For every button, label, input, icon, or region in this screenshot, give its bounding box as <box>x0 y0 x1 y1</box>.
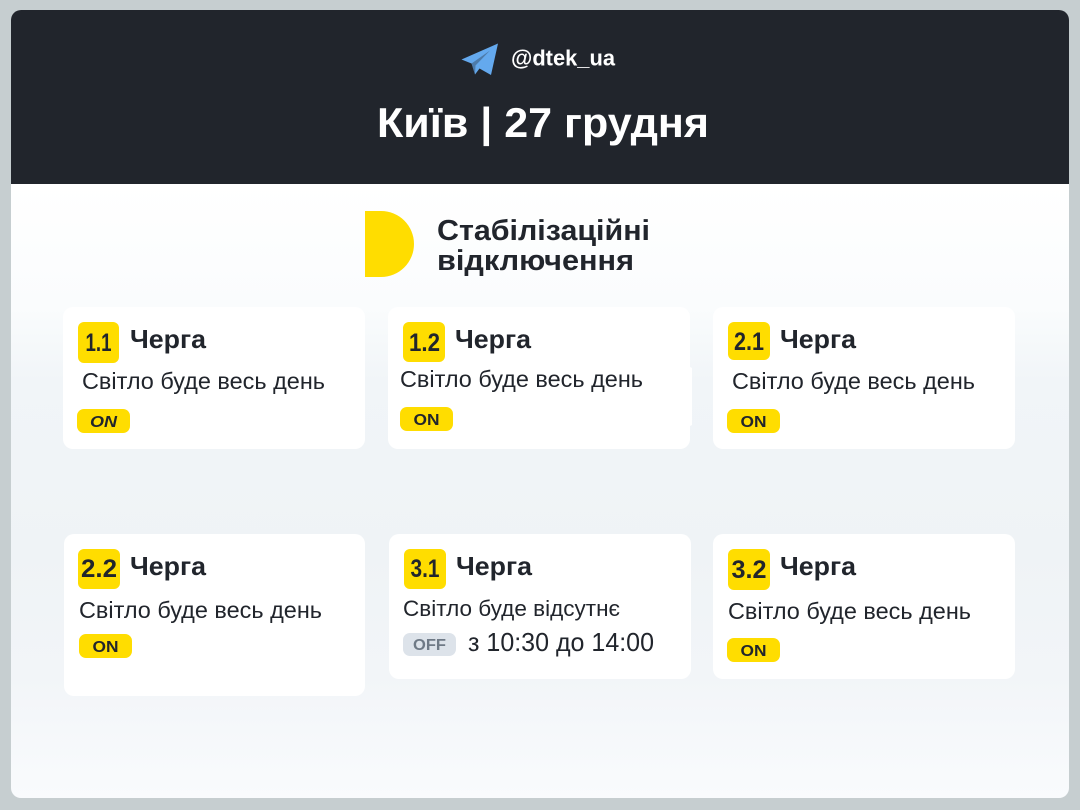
panel: queue 3.1 <box>389 534 691 679</box>
panel: queue 2.2 <box>64 534 365 696</box>
heading: queue: Черга <box>130 324 207 354</box>
status text: Світло буде весь день <box>79 597 322 623</box>
logo: yellow half circle <box>365 211 414 277</box>
heading: queue: Черга <box>780 551 857 581</box>
status text: Світло буде весь день <box>732 368 975 394</box>
status text: Світло буде весь день <box>728 598 971 624</box>
badge 2.1 <box>728 322 770 360</box>
title: Київ | 27 грудня <box>377 99 709 147</box>
pill: OFF: OFF <box>413 637 446 654</box>
heading: queue: Черга <box>456 551 533 581</box>
badge 1.2 <box>403 322 445 362</box>
panel: queue 3.2 <box>713 534 1015 679</box>
panel: queue 2.1 <box>713 307 1015 449</box>
badge 3.2 <box>728 549 770 590</box>
heading: Стабілізаційні <box>437 215 650 247</box>
pill: ON: ON <box>740 643 766 660</box>
handle: @dtek_ua <box>511 46 616 70</box>
heading: queue: Черга <box>780 324 857 354</box>
badge 2.2: 2.2 <box>81 555 117 583</box>
badge 3.2: 3.2 <box>732 556 766 584</box>
pill: ON: ON <box>414 412 440 429</box>
badge 2.2 <box>78 549 120 589</box>
badge 3.1 <box>404 549 446 589</box>
outage time: з 10:30 до 14:00 <box>468 627 654 657</box>
pill: ON: ON <box>90 414 118 431</box>
heading: відключення <box>437 245 634 277</box>
status text: Світло буде весь день <box>400 366 643 392</box>
badge 3.1: 3.1 <box>410 555 440 583</box>
badge 1.2: 1.2 <box>409 329 440 357</box>
pill: OFF <box>403 633 456 656</box>
icon: telegram plane <box>462 44 498 75</box>
status text: Світло буде відсутнє <box>403 596 620 621</box>
pill: ON <box>400 407 453 431</box>
badge 1.1 <box>78 322 119 363</box>
pill: ON <box>727 409 780 433</box>
panel: queue 1.1 <box>63 307 365 449</box>
badge 2.1: 2.1 <box>734 328 764 356</box>
pill: ON <box>77 409 130 433</box>
pill: ON: ON <box>740 414 766 431</box>
pill: ON <box>79 634 132 658</box>
pill: ON: ON <box>92 639 118 656</box>
panel: queue 1.2 <box>388 307 692 449</box>
pill: ON <box>727 638 780 662</box>
badge 1.1: 1.1 <box>86 329 112 357</box>
status text: Світло буде весь день <box>82 368 325 394</box>
heading <box>437 215 650 277</box>
heading: queue: Черга <box>130 551 207 581</box>
heading: queue: Черга <box>455 324 532 354</box>
